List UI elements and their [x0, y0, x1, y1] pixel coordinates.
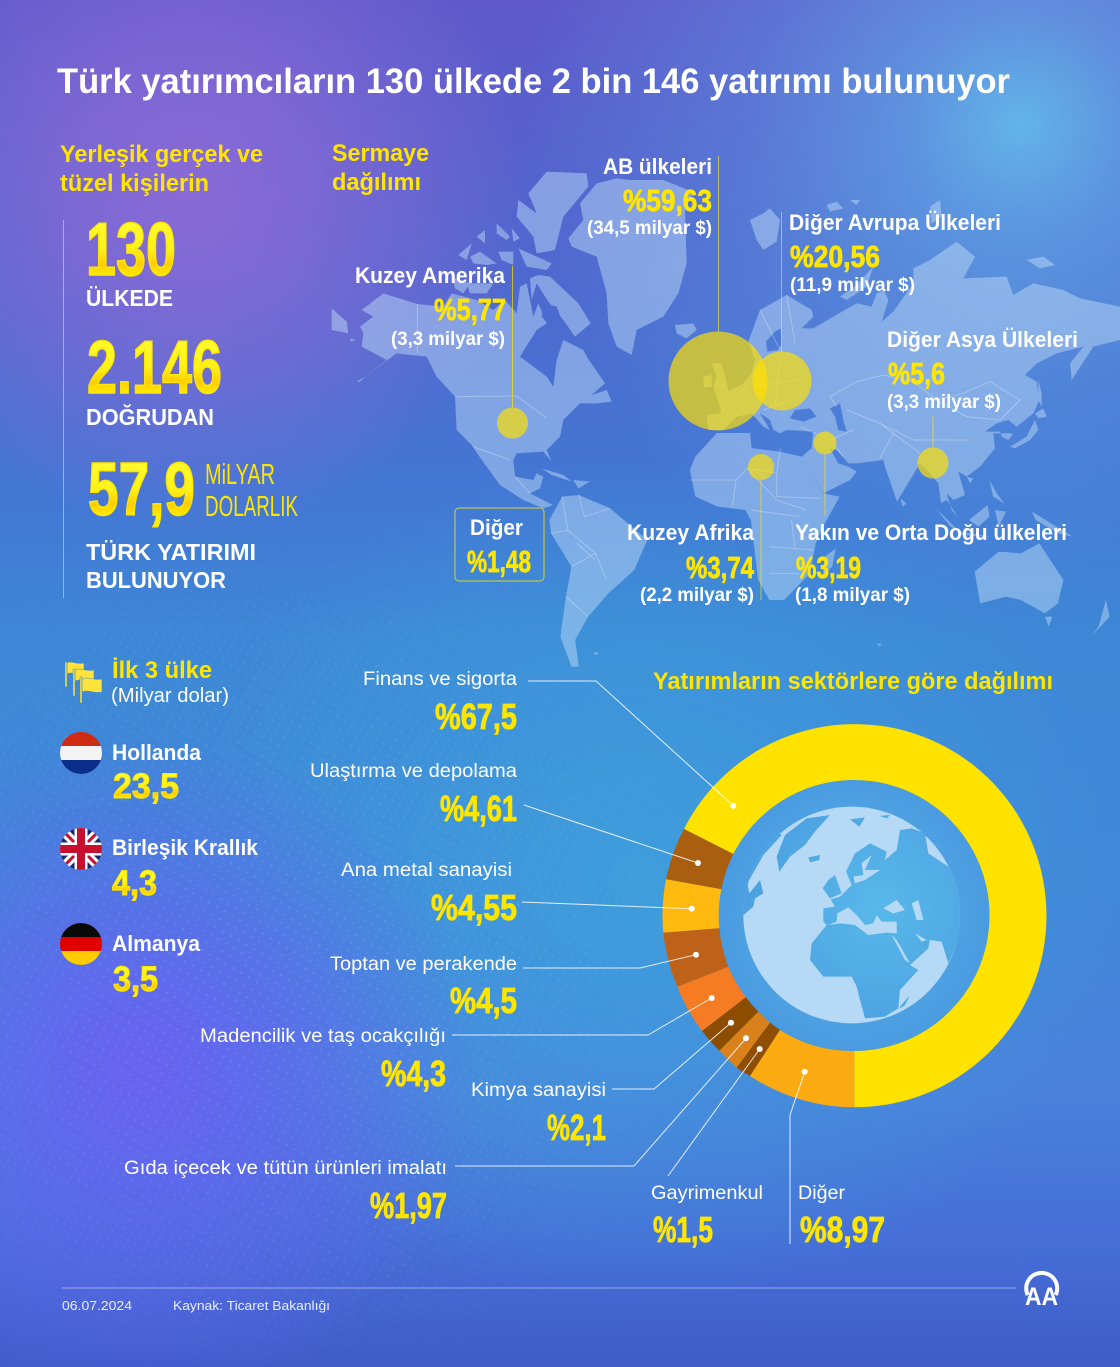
label: metals: %4,55 — [431, 887, 517, 928]
label: metals — [341, 860, 517, 928]
stat: 57.9 billion dollars: TÜRK YATIRIMI — [86, 539, 256, 565]
logo: AA: AA — [1025, 1283, 1058, 1311]
map leader lines — [512, 156, 933, 600]
label: other: Diğer — [798, 1183, 846, 1204]
label: real estate — [651, 1183, 763, 1250]
panel: top 3 countries — [60, 657, 259, 999]
stat: 57.9 billion dollars: DOLARLIK — [205, 491, 298, 523]
label: real estate: Gayrimenkul — [651, 1183, 763, 1204]
map label: other Asia — [887, 327, 1078, 413]
stat: 57.9 billion dollars: MiLYAR — [205, 459, 275, 491]
segment: food — [719, 1012, 770, 1068]
item: United Kingdom — [112, 835, 259, 903]
map label: North Africa: Kuzey Afrika — [627, 520, 755, 545]
label: wholesale: Toptan ve perakende — [330, 954, 517, 975]
item: United Kingdom: Birleşik Krallık — [112, 835, 259, 860]
item: Germany: 3,5 — [113, 960, 158, 999]
label: chemicals: %2,1 — [547, 1107, 606, 1148]
map label: other Asia: %5,6 — [888, 356, 945, 391]
heading: capital distribution: Sermaye — [332, 140, 429, 167]
label: mining: Madencilik ve taş ocakçılığı — [200, 1026, 446, 1047]
label: finance — [363, 669, 517, 737]
label: wholesale — [330, 954, 517, 1021]
label: chemicals — [471, 1080, 606, 1148]
label: food: %1,97 — [370, 1185, 447, 1226]
stat: 130 countries: ÜLKEDE — [86, 285, 173, 311]
label: finance: Finans ve sigorta — [363, 669, 517, 690]
map label: EU: (34,5 milyar $) — [587, 218, 712, 239]
label: food: Gıda içecek ve tütün ürünleri imalatı — [124, 1158, 447, 1179]
flag: Germany — [60, 923, 102, 965]
item: Netherlands: 23,5 — [113, 767, 179, 806]
segment: metals — [663, 879, 721, 933]
map label: North America — [355, 263, 506, 350]
map label: North Africa — [627, 520, 755, 606]
map bubbles — [497, 332, 948, 480]
map label: other Europe: %20,56 — [790, 239, 880, 274]
title: Türk yatırımcıların 130 ülkede 2 bin 146 yatırımı bulunuyor — [57, 62, 1010, 101]
map label: other Europe: (11,9 milyar $) — [790, 275, 915, 296]
leader lines — [452, 681, 808, 1244]
map label: EU — [587, 154, 712, 239]
map label: EU: %59,63 — [623, 183, 712, 218]
item: Netherlands: Hollanda — [112, 740, 202, 765]
map label: North America: Kuzey Amerika — [355, 263, 506, 288]
map label: North America: (3,3 milyar $) — [391, 329, 505, 350]
icon: flags — [65, 662, 102, 703]
map label: North Africa: %3,74 — [686, 550, 755, 585]
item: Netherlands — [112, 740, 202, 806]
stat: 2146 direct: 2.146 — [87, 325, 222, 409]
stat: 2146 direct — [86, 325, 222, 430]
heading: sector distribution: Yatırımların sektörlere göre dağılımı — [653, 668, 1053, 695]
flag: Netherlands — [60, 732, 102, 774]
map label: other box — [455, 508, 544, 581]
segment: wholesale — [663, 928, 728, 987]
map label: North Africa: (2,2 milyar $) — [640, 585, 754, 606]
segment: finance — [684, 724, 1046, 1107]
segment: mining — [677, 967, 746, 1031]
label: wholesale: %4,5 — [450, 980, 517, 1021]
label: chemicals: Kimya sanayisi — [471, 1080, 606, 1101]
donut chart — [663, 724, 1046, 1107]
map label: other box: %1,48 — [467, 544, 531, 579]
map label: other Asia: (3,3 milyar $) — [887, 392, 1001, 413]
footer: date: 06.07.2024 — [62, 1298, 132, 1313]
map label: other Asia: Diğer Asya Ülkeleri — [887, 327, 1078, 352]
map label: EU: AB ülkeleri — [603, 154, 712, 179]
map label: other Europe: Diğer Avrupa Ülkeleri — [789, 210, 1001, 235]
heading: capital distribution: dağılımı — [332, 169, 421, 196]
label: finance: %67,5 — [435, 696, 517, 737]
label: metals: Ana metal sanayisi — [341, 860, 512, 881]
segment: real estate — [737, 1023, 780, 1076]
map label: Middle East: (1,8 milyar $) — [795, 585, 910, 606]
segment: chemicals — [702, 997, 758, 1051]
label: real estate: %1,5 — [653, 1209, 713, 1250]
map label: Middle East: Yakın ve Orta Doğu ülkeleri — [795, 520, 1067, 545]
label: transport: Ulaştırma ve depolama — [310, 761, 517, 782]
stat: 57.9 billion dollars: BULUNUYOR — [86, 567, 226, 593]
heading: capital distribution — [332, 140, 429, 196]
stat: 130 countries: 130 — [86, 207, 176, 291]
stat: 57.9 billion dollars — [86, 447, 298, 593]
heading: top 3: (Milyar dolar) — [111, 685, 229, 707]
segment: other — [750, 1030, 854, 1107]
world map — [332, 172, 1120, 667]
heading: top 3 — [111, 657, 229, 707]
stat: 2146 direct: DOĞRUDAN — [86, 403, 214, 430]
heading: residents: Yerleşik gerçek ve — [60, 141, 263, 168]
heading: residents — [60, 141, 263, 197]
label: mining — [200, 1026, 446, 1094]
segment: transport — [666, 829, 733, 889]
item: Germany: Almanya — [112, 931, 201, 956]
map label: other box: Diğer — [470, 515, 523, 540]
stat: 130 countries — [86, 207, 176, 311]
map label: Middle East — [795, 520, 1067, 606]
heading: top 3: İlk 3 ülke — [112, 657, 212, 684]
map label: North America: %5,77 — [434, 292, 506, 327]
globe — [737, 807, 973, 1023]
heading: residents: tüzel kişilerin — [60, 170, 209, 197]
label: food — [124, 1158, 447, 1226]
label: transport: %4,61 — [440, 788, 517, 829]
map label: other Europe — [789, 210, 1001, 296]
item: Germany — [112, 931, 201, 999]
item: United Kingdom: 4,3 — [112, 864, 157, 903]
map label: Middle East: %3,19 — [796, 550, 861, 585]
label: transport — [310, 761, 517, 829]
stat: 57.9 billion dollars: 57,9 — [88, 447, 195, 531]
flag: United Kingdom — [60, 828, 102, 870]
label: other: %8,97 — [800, 1209, 885, 1250]
label: other — [798, 1183, 885, 1250]
footer: source: Kaynak: Ticaret Bakanlığı — [173, 1298, 330, 1313]
label: mining: %4,3 — [381, 1053, 446, 1094]
panel: key figures — [60, 141, 298, 598]
logo: AA — [1025, 1273, 1058, 1311]
